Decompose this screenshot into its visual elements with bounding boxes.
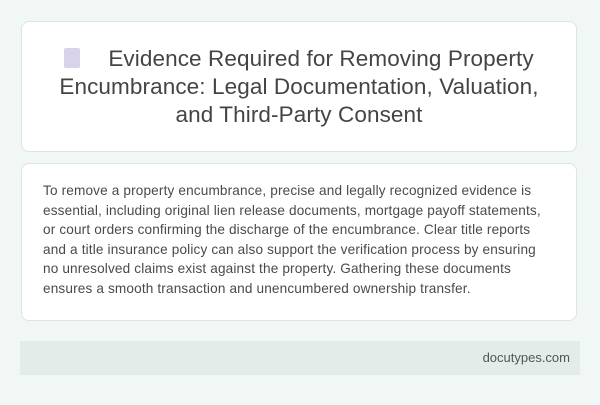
footer bbox=[20, 341, 580, 375]
icon: document bbox=[64, 48, 80, 68]
description text: and a title insurance policy can also support the verification process by ensuring bbox=[43, 242, 536, 257]
description text: To remove a property encumbrance, precise and legally recognized evidence is bbox=[43, 183, 531, 198]
description text: ensures a smooth transaction and unencumbered ownership transfer. bbox=[43, 281, 471, 296]
description text: no unresolved claims exist against the property. Gathering these documents bbox=[43, 261, 511, 276]
description text: or court orders confirming the discharge of the encumbrance. Clear title reports bbox=[43, 222, 530, 237]
header card bbox=[21, 21, 577, 152]
description text: essential, including original lien release documents, mortgage payoff statements, bbox=[43, 203, 541, 218]
body card bbox=[21, 163, 577, 321]
footer: docutypes.com bbox=[483, 350, 570, 365]
title: Evidence Required for Removing Property Encumbrance: Legal Documentation, Valuation, and Third-Party Consent bbox=[59, 46, 539, 126]
description text bbox=[43, 183, 541, 296]
